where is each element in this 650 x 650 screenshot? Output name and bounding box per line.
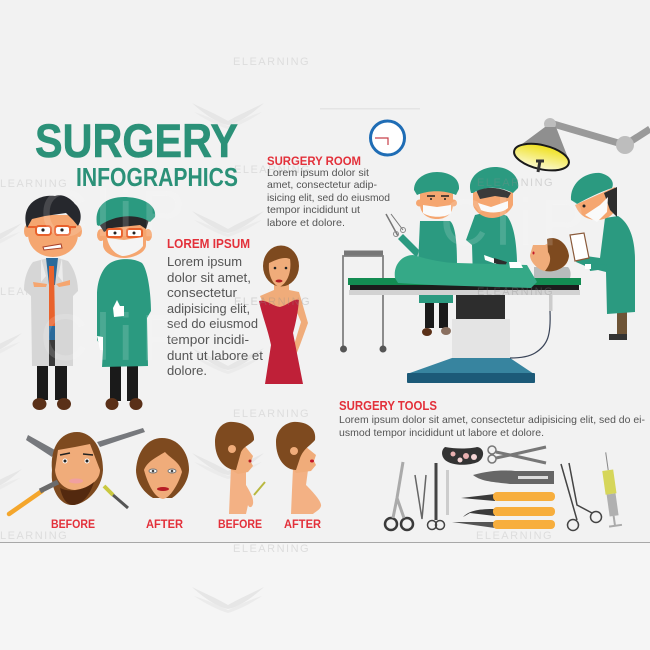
text block: surgery tools: Lorem ipsum dolor sit amet, consectetur adipisicing elit, sed do ei- [339,414,645,426]
text block: lorem ipsum: consectetur [167,285,238,300]
surgeon: right with clipboard [570,173,635,340]
tool: forceps [561,463,602,530]
lower band [0,542,650,650]
tool: left scissors [385,462,413,530]
text block: lorem ipsum: dolor sit amet, [167,270,251,285]
heading: surgery room: SURGERY ROOM [267,154,361,168]
text block: lorem ipsum [167,254,263,378]
overlay watermark: elearning: ELEARNING [477,177,554,189]
before / after labels: BEFORE [218,519,262,531]
surgical tools [385,446,622,530]
operating table [348,278,581,383]
background watermarks: ELEARNING [233,56,310,68]
background watermarks: LEARNING [0,178,68,190]
tool: syringe [599,452,622,527]
heading: lorem ipsum: LOREM IPSUM [167,237,250,251]
text block: surgery room [267,167,390,229]
profile: before [215,422,265,514]
text block: surgery room: amet, consectetur adip- [267,179,377,191]
face: after [136,438,189,499]
text block: lorem ipsum: dolore. [167,363,207,378]
tool: large scalpel [473,470,554,484]
overlay watermark: elearning [234,177,554,308]
icon: surgical lamp [512,118,650,175]
icon: clipboard [570,233,589,261]
icon: small syringe [254,482,265,495]
patient [395,238,571,288]
tool: kidney dish [442,447,483,465]
figure: doctor in white coat [24,195,82,410]
icon: scalpel [9,482,58,514]
text block: lorem ipsum: Lorem ipsum [167,254,242,269]
heading: surgery tools: SURGERY TOOLS [339,399,437,413]
trolley [340,253,386,352]
icon: clock [370,121,404,155]
background watermarks: ELEARNING [233,543,310,555]
surgeon: rear with scissors [386,172,459,336]
overlay watermark: clip: CliP [40,300,193,374]
background watermarks: ELEARNING [476,530,553,542]
overlay watermark: elearning: ELEARNING [477,286,554,298]
background watermarks [0,56,553,613]
text block: surgery room: isicing elit, sed do eiusmod [267,192,390,204]
icon: syringe [104,486,128,508]
background watermarks: ELEARNING [233,408,310,420]
before / after labels [51,519,322,531]
text block: surgery tools [339,414,645,439]
overlay watermark: clip [40,176,593,374]
tool: tweezers [415,475,426,519]
background watermarks: ELEARNING [234,164,311,176]
tool: narrow scissors [428,463,444,530]
text block: lorem ipsum: sed do eiusmod [167,316,258,331]
text block: lorem ipsum: tempor incidi- [167,332,249,347]
text block: lorem ipsum: adipisicing elit, [167,301,250,316]
text block: surgery room: Lorem ipsum dolor sit [267,167,369,179]
text block: surgery room: tempor incididunt ut [267,204,360,216]
tool: probe [446,470,449,515]
background watermarks: LEARNING [0,530,68,542]
face: before [9,428,145,514]
background watermarks: LEARNING [0,286,68,298]
before / after labels: AFTER [146,519,184,531]
text block: lorem ipsum: dunt ut labore et [167,348,263,363]
figure: woman in red dress [259,246,308,384]
surgeon: middle [466,167,518,280]
title [35,114,238,192]
overlay watermark: clip: CliP [440,185,593,259]
title: SURGERY [35,114,238,167]
profile: after [276,422,321,514]
text block: surgery tools: usmod tempor incididunt ut labore et dolore. [339,427,544,439]
tool: orange scalpels [452,492,555,529]
title: INFOGRAPHICS [76,162,238,192]
before / after labels: AFTER [284,519,322,531]
figure: surgeon in green gown [97,197,155,410]
text block: surgery room: labore et dolore. [267,217,345,229]
tool: scissors top [488,446,546,463]
overlay watermark: clip: CliP [40,176,193,250]
overlay watermark: elearning: ELEARNING [234,296,311,308]
before / after labels: BEFORE [51,519,95,531]
